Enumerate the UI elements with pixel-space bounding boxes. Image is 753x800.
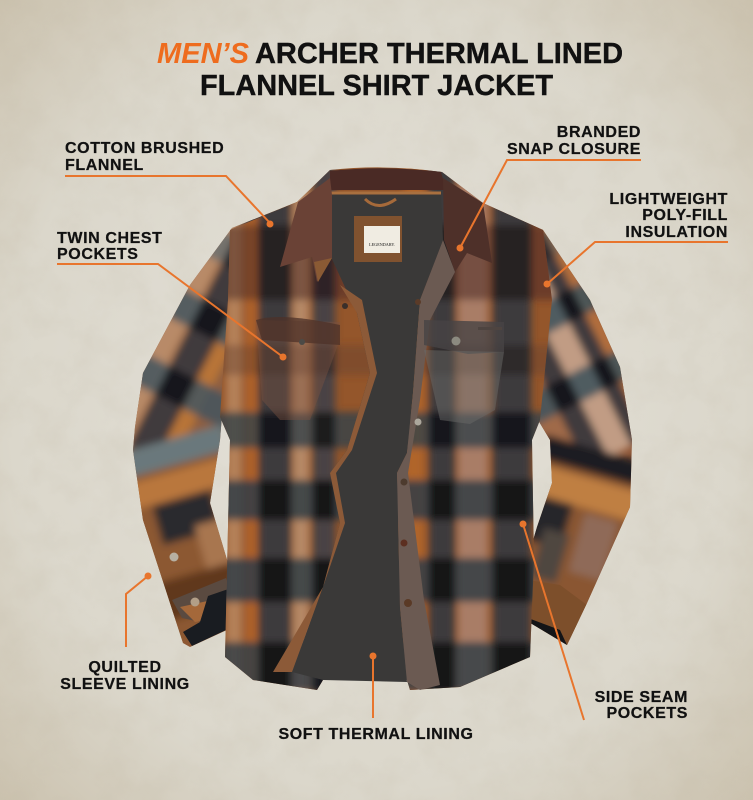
jacket photo illustration	[126, 167, 632, 703]
snap buttons	[170, 299, 422, 607]
left sleeve	[133, 202, 296, 647]
callout: branded snap closure: SNAP CLOSURE	[507, 141, 641, 158]
callout: cotton brushed flannel: FLANNEL	[65, 157, 144, 174]
callout: quilted sleeve lining: QUILTED	[88, 659, 162, 676]
collar band and hanger loop	[330, 168, 446, 206]
callout: side seam pockets	[520, 520, 688, 722]
title: MEN’S	[157, 38, 250, 70]
left cuff	[172, 578, 226, 622]
title: ARCHER THERMAL LINED	[255, 38, 623, 70]
collar leaves	[280, 178, 492, 282]
callout: lightweight poly-fill insulation: LIGHTWEIGHT	[609, 191, 728, 208]
callout: quilted sleeve lining: SLEEVE LINING	[60, 676, 190, 693]
thermal lining	[292, 193, 443, 682]
brand label	[354, 216, 402, 262]
title	[157, 38, 623, 102]
callout: soft thermal lining: SOFT THERMAL LINING	[278, 726, 474, 743]
chest pocket right	[424, 320, 504, 424]
callout: lightweight poly-fill insulation: INSULATION	[625, 224, 728, 241]
callout: lightweight poly-fill insulation	[544, 191, 728, 288]
chest pocket left	[256, 317, 340, 420]
callout: soft thermal lining	[278, 652, 474, 743]
callout: side seam pockets: SIDE SEAM	[595, 689, 688, 706]
callout: cotton brushed flannel	[65, 140, 274, 228]
callout: quilted sleeve lining	[60, 572, 190, 693]
callout: twin chest pockets	[57, 230, 286, 360]
title: FLANNEL SHIRT JACKET	[200, 70, 554, 102]
callout: twin chest pockets: TWIN CHEST	[57, 230, 163, 247]
right sleeve	[484, 204, 632, 645]
callout: branded snap closure	[456, 124, 641, 252]
brand label: LEGENDARY.	[369, 242, 395, 247]
callout: cotton brushed flannel: COTTON BRUSHED	[65, 140, 224, 157]
callout: side seam pockets: POCKETS	[606, 705, 688, 722]
right cuff	[532, 581, 586, 645]
callout: lightweight poly-fill insulation: POLY-FILL	[642, 207, 728, 224]
jacket body	[210, 165, 560, 695]
placket edges	[273, 285, 377, 672]
callout: branded snap closure: BRANDED	[557, 124, 641, 141]
callout: twin chest pockets: POCKETS	[57, 246, 139, 263]
